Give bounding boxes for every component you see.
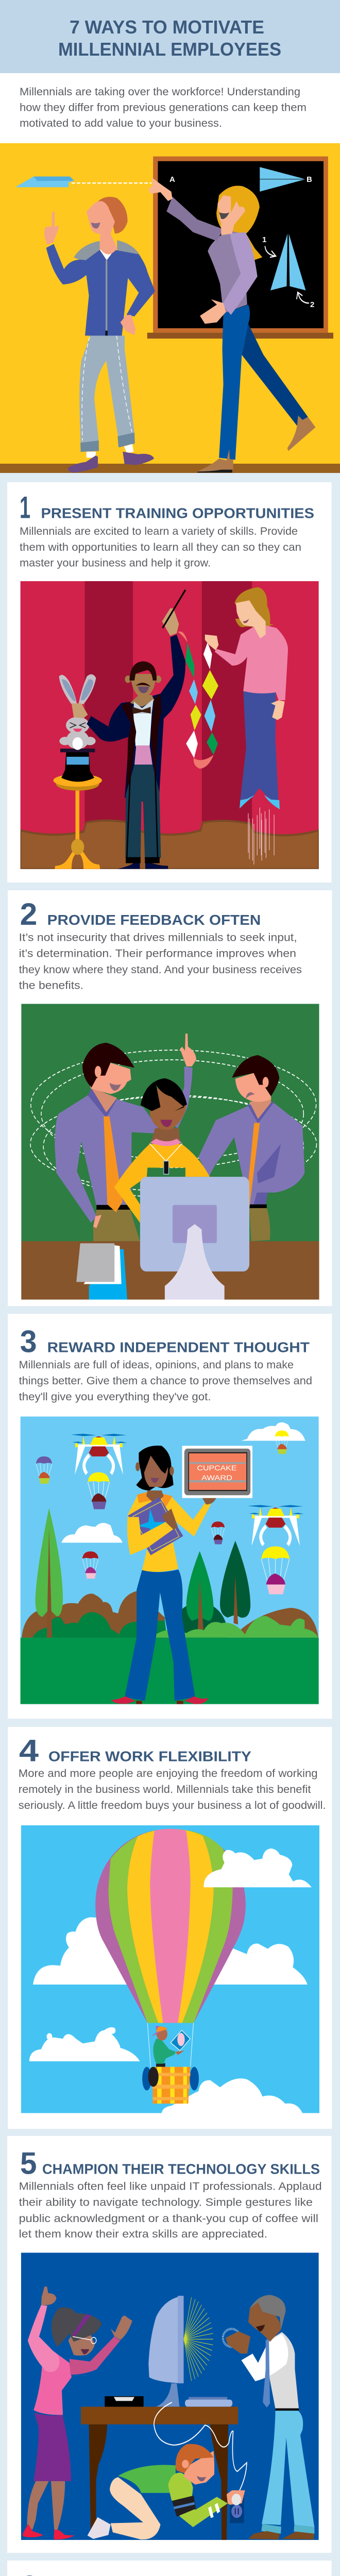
blackboard — [147, 157, 333, 338]
body text 4 — [19, 1768, 326, 1811]
award label — [197, 1464, 237, 1482]
right coworker — [198, 1055, 304, 1241]
streamers — [178, 632, 218, 769]
body text 5: Millennials often feel like unpaid IT professionals. Applaud — [19, 2180, 322, 2193]
right man — [223, 2295, 314, 2539]
plane labels: 1 — [262, 235, 266, 244]
panel: 3 reward independent thought — [8, 1314, 332, 1719]
illustration: cupcake award and drones — [21, 1416, 319, 1704]
number 3: 3 — [20, 1325, 37, 1359]
body text 3: things better. Give them a chance to prove themselves and — [19, 1375, 312, 1387]
levitating woman — [205, 587, 288, 865]
intro text — [0, 73, 340, 143]
boy under desk — [88, 2444, 245, 2539]
plane labels — [169, 175, 314, 309]
table and hat — [54, 749, 102, 869]
illustration: office celebration — [21, 2252, 319, 2540]
landscape — [21, 1508, 319, 1704]
body text 2: they know where they stand. And your business receives — [19, 964, 302, 976]
award certificate — [182, 1446, 252, 1498]
body text 2: the benefits. — [19, 979, 83, 991]
heading 2: PROVIDE FEEDBACK OFTEN — [47, 912, 261, 928]
body text 5 — [19, 2180, 322, 2240]
panel: 5 champion their technology skills — [7, 2136, 332, 2553]
body text 3: Millennials are full of ideas, opinions, and plans to make — [19, 1359, 294, 1371]
drones — [71, 1434, 303, 1546]
number 1: 1 — [20, 490, 30, 524]
heading 4: OFFER WORK FLEXIBILITY — [48, 1748, 251, 1764]
illustration: coworkers at computer — [21, 1004, 319, 1299]
left woman — [23, 2286, 132, 2539]
person with tablet — [151, 2026, 190, 2067]
illustration: hot air balloon — [21, 1825, 319, 2113]
left coworker — [55, 1043, 158, 1241]
cloud in front of balloon — [204, 1849, 312, 1887]
monitor — [140, 1177, 249, 1299]
body text 4: remotely in the business world. Millennials take this benefit — [19, 1784, 311, 1795]
cupcake parachutes — [36, 1430, 290, 1594]
intro text: Millennials are taking over the workforce! Understanding — [20, 86, 300, 98]
rabbit — [59, 674, 96, 750]
paper plane — [15, 177, 152, 187]
man — [44, 197, 155, 452]
desk and computer — [81, 2296, 238, 2540]
feet — [68, 433, 233, 472]
number 4: 4 — [19, 1733, 39, 1768]
heading 1: PRESENT TRAINING OPPORTUNITIES — [41, 505, 314, 521]
intro text: motivated to add value to your business. — [20, 117, 222, 129]
panel: 4 offer work flexibility — [8, 1727, 332, 2129]
panel: 6 give them project ownership — [7, 2561, 332, 2576]
title banner — [0, 0, 340, 73]
number 2: 2 — [20, 897, 37, 931]
body text 5: let them know their extra skills are appreciated. — [19, 2228, 267, 2240]
body text 5: public acknowledgment or a thank-you cup of coffee will — [19, 2213, 318, 2225]
body text 1 — [20, 526, 301, 569]
basket and sandbags — [142, 2023, 199, 2104]
body text 1: master your business and help it grow. — [20, 557, 211, 569]
plane labels: B — [307, 175, 312, 184]
clouds — [61, 1422, 305, 1543]
panel: 1 present training opportunities — [7, 482, 332, 883]
hero illustration: paper plane lesson — [0, 143, 340, 473]
panel: 2 provide feedback often — [8, 890, 332, 1306]
woman — [148, 177, 315, 460]
intro text: how they differ from previous generations can keep them — [20, 102, 307, 113]
body text 4: More and more people are enjoying the freedom of working — [19, 1768, 318, 1780]
dashed orbit lines — [30, 1050, 317, 1198]
heading 3: REWARD INDEPENDENT THOUGHT — [47, 1340, 310, 1355]
magician — [87, 590, 185, 869]
title banner: MILLENNIAL EMPLOYEES — [58, 39, 281, 60]
illustration: magician on stage — [21, 581, 319, 869]
title banner: 7 WAYS TO MOTIVATE — [70, 16, 264, 38]
hero drawing — [15, 157, 333, 460]
body text 1: Millennials are excited to learn a variety of skills. Provide — [20, 526, 298, 537]
center woman — [114, 1033, 210, 1223]
body text 2: it’s determination. Their performance improves when — [19, 948, 296, 960]
papers — [76, 1243, 127, 1299]
plane labels: 2 — [310, 300, 314, 309]
woman holding award — [111, 1446, 216, 1704]
number 5: 5 — [20, 2146, 37, 2180]
award label: AWARD — [201, 1473, 232, 1482]
body text 1: them with opportunities to learn all they can so they can — [20, 541, 301, 553]
award label: CUPCAKE — [197, 1464, 237, 1472]
body text 3: they'll give you everything they've got. — [19, 1391, 211, 1403]
body text 4: seriously. A little freedom buys your business a lot of goodwill. — [19, 1800, 326, 1811]
body text 3 — [19, 1359, 312, 1403]
body text 2 — [19, 931, 302, 991]
plane labels: A — [169, 175, 175, 184]
body text 2: It’s not insecurity that drives millennials to seek input, — [19, 931, 297, 944]
power outlet — [230, 2494, 244, 2523]
clouds behind balloon — [29, 1917, 308, 2113]
heading 5: CHAMPION THEIR TECHNOLOGY SKILLS — [42, 2161, 320, 2177]
balloon envelope — [95, 1829, 246, 2023]
cable — [154, 2402, 247, 2490]
body text 5: their ability to navigate technology. Simple gestures like — [19, 2197, 313, 2209]
